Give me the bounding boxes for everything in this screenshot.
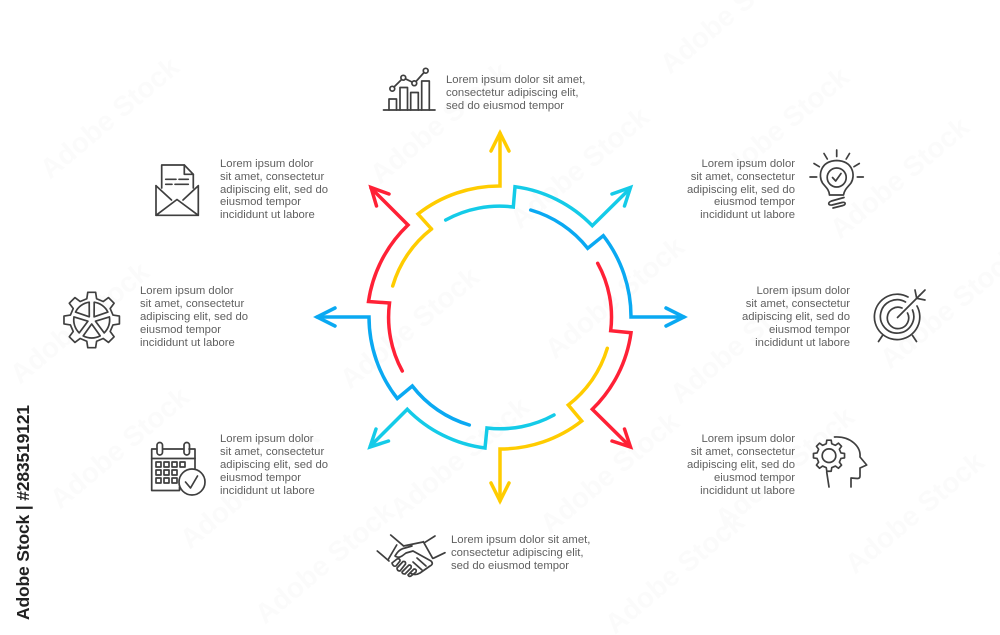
arrow: yellow top xyxy=(393,133,509,286)
background watermark: Adobe Stock xyxy=(534,406,685,540)
text: lower left: eiusmod tempor xyxy=(220,472,301,484)
text: lower right xyxy=(687,433,795,497)
background watermark: Adobe Stock xyxy=(504,101,655,235)
text: right: sit amet, consectetur xyxy=(746,298,850,310)
text: lower left xyxy=(220,433,328,497)
arrow: yellow bottom xyxy=(491,348,607,501)
background watermark: Adobe Stock xyxy=(364,56,515,190)
text: lower left: sit amet, consectetur xyxy=(220,446,324,458)
background watermark: Adobe Stock xyxy=(4,256,155,390)
text: upper right: Lorem ipsum dolor xyxy=(701,158,795,170)
background watermark: Adobe Stock xyxy=(174,421,325,555)
icon: bar chart xyxy=(384,68,435,110)
icon: handshake xyxy=(377,535,445,576)
text: lower right: eiusmod tempor xyxy=(714,472,795,484)
text: upper right: incididunt ut labore xyxy=(700,209,795,221)
arrow: cyan upper right xyxy=(446,187,630,226)
text: top: consectetur adipiscing elit, xyxy=(446,87,578,99)
arrow: cyan lower left xyxy=(370,409,554,448)
text: upper left: adipiscing elit, sed do xyxy=(220,184,328,196)
text: bottom: consectetur adipiscing elit, xyxy=(451,547,584,559)
icon: target xyxy=(874,290,925,342)
background watermark: Adobe Stock xyxy=(709,401,860,535)
text: left: adipiscing elit, sed do xyxy=(140,311,248,323)
background watermark: Adobe Stock xyxy=(539,231,690,365)
text: upper right xyxy=(687,158,795,221)
text: lower right: adipiscing elit, sed do xyxy=(687,459,795,471)
text: right: Lorem ipsum dolor xyxy=(756,285,850,297)
background watermark: Adobe Stock xyxy=(824,111,975,245)
text: upper left: eiusmod tempor xyxy=(220,196,301,208)
arrow: blue left xyxy=(317,308,469,425)
background watermark: Adobe Stock xyxy=(249,496,400,630)
text: right: incididunt ut labore xyxy=(755,337,850,349)
background watermark: Adobe Stock xyxy=(704,61,855,195)
arrow: red upper left xyxy=(368,188,408,371)
icon: calendar xyxy=(152,442,205,495)
text: upper right: eiusmod tempor xyxy=(714,196,795,208)
arrow: red lower right xyxy=(592,263,631,447)
text: right: adipiscing elit, sed do xyxy=(742,311,850,323)
text: left: incididunt ut labore xyxy=(140,337,235,349)
text: lower left: adipiscing elit, sed do xyxy=(220,459,328,471)
text: upper right: adipiscing elit, sed do xyxy=(687,184,795,196)
background watermark: Adobe Stock xyxy=(34,51,185,185)
text: top xyxy=(446,74,585,112)
text: lower left: incididunt ut labore xyxy=(220,485,315,497)
text: left: sit amet, consectetur xyxy=(140,298,244,310)
text: lower right: sit amet, consectetur xyxy=(691,446,795,458)
text: right xyxy=(742,285,850,349)
text: upper left: Lorem ipsum dolor xyxy=(220,158,314,170)
text: upper left: sit amet, consectetur xyxy=(220,171,324,183)
text: top: Lorem ipsum dolor sit amet, xyxy=(446,74,585,86)
text: bottom xyxy=(451,534,590,572)
text: left: Lorem ipsum dolor xyxy=(140,285,234,297)
background watermark: Adobe Stock xyxy=(334,261,485,395)
text: bottom: Lorem ipsum dolor sit amet, xyxy=(451,534,590,546)
background watermark: Adobe Stock xyxy=(839,446,990,580)
icon: light bulb xyxy=(810,150,863,208)
text: left: eiusmod tempor xyxy=(140,324,221,336)
text: upper left: incididunt ut labore xyxy=(220,209,315,221)
background watermark: Adobe Stock xyxy=(384,391,535,525)
icon: head with gear xyxy=(813,437,867,487)
background watermark: Adobe Stock xyxy=(44,381,195,515)
arrow: blue right xyxy=(531,210,684,326)
text: lower right: incididunt ut labore xyxy=(700,485,795,497)
icon: envelope with letter xyxy=(156,165,198,215)
text: bottom: sed do eiusmod tempor xyxy=(451,560,569,572)
text: right: eiusmod tempor xyxy=(769,324,850,336)
stock id label: Adobe Stock | #283519121 xyxy=(13,405,33,620)
text: lower left: Lorem ipsum dolor xyxy=(220,433,314,445)
text: left xyxy=(140,285,248,349)
text: upper left xyxy=(220,158,328,221)
icon: gear with wedges xyxy=(64,292,119,348)
text: lower right: Lorem ipsum dolor xyxy=(701,433,795,445)
text: upper right: sit amet, consectetur xyxy=(691,171,795,183)
text: top: sed do eiusmod tempor xyxy=(446,100,564,112)
background watermark: Adobe Stock xyxy=(664,276,815,410)
